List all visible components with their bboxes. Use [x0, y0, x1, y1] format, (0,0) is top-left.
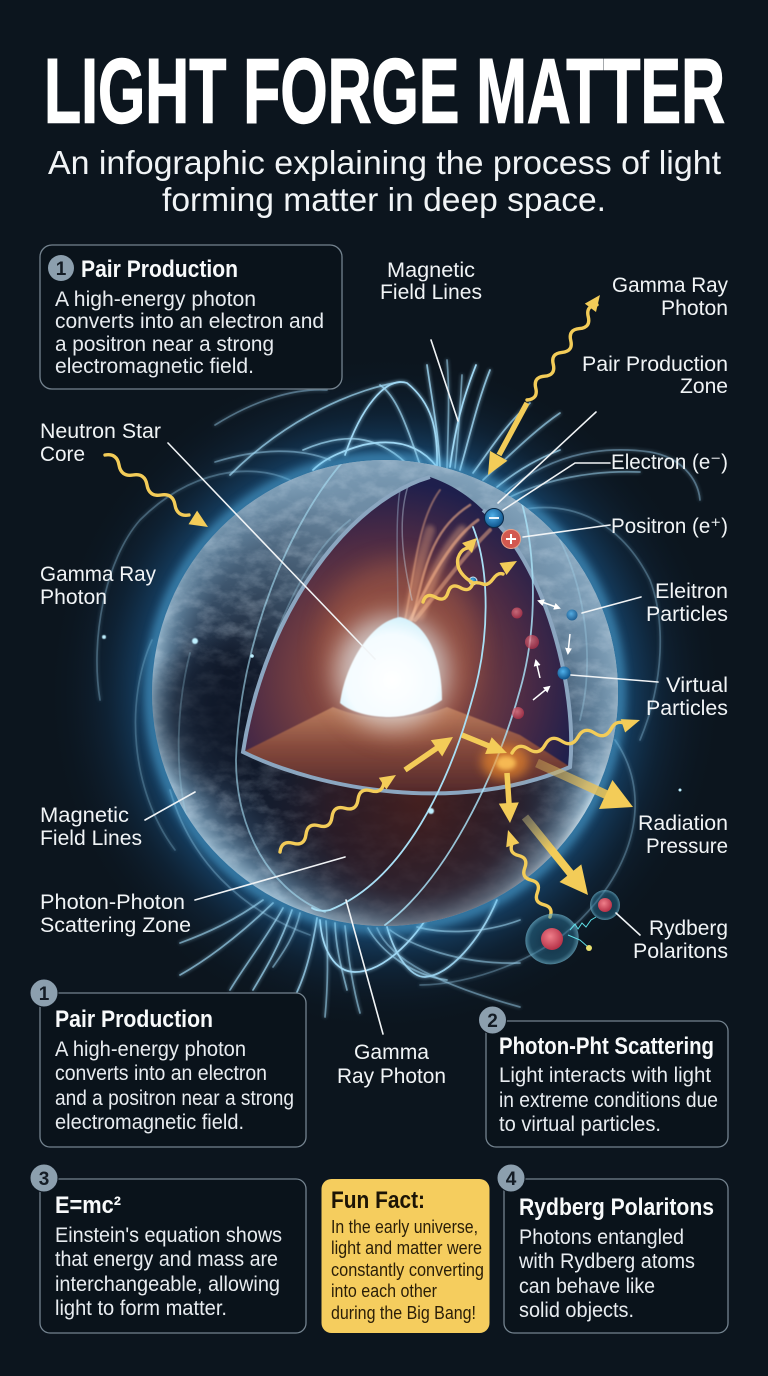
cut-away interior	[243, 477, 571, 793]
small polariton	[590, 890, 620, 920]
magnetic field lines outside sphere	[97, 360, 700, 1017]
heading: Fun Fact:	[331, 1187, 425, 1214]
badge 2	[478, 1006, 506, 1034]
arrow: radiation pressure	[537, 763, 633, 809]
badge 2: 2	[487, 1011, 498, 1032]
virtual particles	[469, 577, 578, 719]
body text: and a positron near a strong	[55, 1087, 294, 1110]
body text: electromagnetic field.	[55, 1111, 244, 1134]
badge 1: 1	[56, 259, 67, 280]
heading: Rydberg Polaritons	[519, 1194, 714, 1221]
body text	[518, 1226, 695, 1322]
small atom	[586, 945, 592, 951]
leader lines	[145, 340, 658, 1034]
label: gamma ray photon bottom: Gamma	[354, 1040, 429, 1064]
badge 3: 3	[39, 1169, 49, 1190]
badge 1	[48, 255, 74, 281]
arrow: down from collision	[499, 773, 519, 823]
body text	[499, 1064, 718, 1136]
core glow	[336, 616, 448, 728]
arrow: lower wavy photon	[280, 775, 396, 852]
heading: Photon-Pht Scattering	[499, 1033, 714, 1060]
panel: card 1 pair production	[30, 979, 306, 1147]
arrow: wavy from polariton	[506, 830, 551, 917]
label: pair production zone: Pair Production	[582, 352, 728, 376]
collision burst	[481, 744, 529, 780]
body text: solid objects.	[519, 1299, 634, 1322]
shell dark left tone	[152, 643, 276, 792]
label: gamma ray photon bottom: Ray Photon	[337, 1064, 446, 1088]
body text	[331, 1216, 484, 1323]
body text: converts into an electron	[55, 1062, 267, 1085]
label: positron: Positron (e⁺)	[611, 514, 728, 538]
label: magnetic field lines left: Magnetic	[40, 803, 129, 827]
label: magnetic field lines left	[40, 803, 142, 850]
body text: Photons entangled	[519, 1226, 684, 1249]
particles	[469, 508, 578, 719]
label: radiation pressure: Pressure	[646, 834, 728, 858]
body text: electromagnetic field.	[55, 355, 254, 378]
label: gamma ray photon top right: Gamma Ray	[612, 273, 728, 297]
body text: to virtual particles.	[499, 1113, 661, 1136]
arrow: photon to collision 2	[462, 735, 507, 754]
body text: In the early universe,	[331, 1216, 478, 1237]
body text: that energy and mass are	[55, 1248, 278, 1271]
body text: light to form matter.	[55, 1297, 227, 1320]
label: eleitron particles: Particles	[646, 602, 728, 626]
label: virtual particles: Virtual	[666, 673, 728, 697]
label: gamma ray photon bottom	[337, 1040, 446, 1088]
interior floor	[245, 706, 568, 792]
cut-away rim	[243, 477, 571, 793]
body text: Einstein's equation shows	[55, 1224, 282, 1247]
subtitle: forming matter in deep space.	[162, 181, 606, 218]
label: scattering zone: Photon-Photon	[40, 890, 185, 914]
field lines through sphere	[179, 457, 587, 925]
small white arrows	[533, 601, 570, 700]
badge 4: 4	[506, 1169, 517, 1190]
positron	[502, 530, 520, 548]
body text: during the Big Bang!	[331, 1302, 476, 1323]
arrow: incoming gamma ray left	[105, 455, 208, 527]
body text: in extreme conditions due	[499, 1089, 718, 1112]
body text: into each other	[331, 1280, 437, 1301]
neutron star sphere	[102, 457, 682, 970]
subtitle: An infographic explaining the process of light	[48, 144, 721, 181]
label: scattering zone	[40, 890, 191, 937]
label: gamma ray photon left: Photon	[40, 585, 107, 609]
label: magnetic field lines top: Field Lines	[380, 280, 482, 304]
label: gamma ray photon left: Gamma Ray	[40, 562, 156, 586]
electron	[484, 508, 504, 528]
sparkles	[102, 635, 682, 814]
body text	[55, 288, 324, 378]
badge 1: 1	[39, 984, 50, 1005]
badge 1	[30, 979, 58, 1007]
arrow: inner wavy photon	[423, 538, 517, 602]
sphere glow	[0, 340, 768, 1040]
label: virtual particles: Particles	[646, 696, 728, 720]
label: neutron star core	[40, 419, 161, 466]
large polariton	[517, 905, 587, 973]
label: scattering zone: Scattering Zone	[40, 913, 191, 937]
arrow: to rydberg polaritons	[525, 817, 588, 895]
body text: can behave like	[519, 1275, 655, 1298]
label: gamma ray photon left	[40, 562, 156, 609]
body text: constantly converting	[331, 1259, 484, 1280]
body text	[55, 1224, 282, 1320]
panel: card 4 rydberg polaritons	[497, 1164, 728, 1333]
subtitle	[48, 144, 721, 218]
body text: Light interacts with light	[499, 1064, 711, 1087]
arrow: gamma ray into pair production zone	[488, 295, 600, 475]
body text: converts into an electron and	[55, 310, 324, 333]
badge 4	[497, 1164, 525, 1192]
body text: A high-energy photon	[55, 1038, 246, 1061]
heading: E=mc²	[55, 1192, 121, 1219]
label: eleitron particles: Eleitron	[655, 579, 728, 603]
body text: light and matter were	[331, 1237, 482, 1258]
panel: top pair production	[40, 245, 342, 389]
label: radiation pressure: Radiation	[638, 811, 728, 835]
neutron star core	[340, 617, 442, 717]
label: pair production zone: Zone	[680, 374, 728, 398]
label: virtual particles	[646, 673, 728, 720]
label: gamma ray photon top right: Photon	[661, 296, 728, 320]
label: radiation pressure	[638, 811, 728, 858]
label: neutron star core: Neutron Star	[40, 419, 161, 443]
label: rydberg polaritons	[633, 916, 728, 963]
shell upper cap tone	[170, 460, 618, 816]
body text	[55, 1038, 294, 1134]
label: magnetic field lines left: Field Lines	[40, 826, 142, 850]
sphere outer glow	[150, 458, 620, 928]
shell brown lower tone	[268, 750, 586, 926]
label: magnetic field lines top	[380, 258, 482, 304]
core plume	[397, 480, 490, 625]
body text: A high-energy photon	[55, 288, 256, 311]
panel: card 3 e=mc2	[30, 1164, 306, 1333]
label: pair production zone	[582, 352, 728, 398]
label: eleitron particles	[646, 579, 728, 626]
label: magnetic field lines top: Magnetic	[387, 258, 475, 282]
heading: Pair Production	[55, 1006, 213, 1033]
panel: card 2 photon scattering	[478, 1006, 728, 1147]
body text: a positron near a strong	[55, 333, 274, 356]
label: gamma ray photon top right	[612, 273, 728, 320]
label: neutron star core: Core	[40, 442, 85, 466]
body text: interchangeable, allowing	[55, 1273, 280, 1296]
rydberg polaritons	[517, 890, 620, 973]
shell surface texture	[150, 458, 620, 928]
entanglement squiggle	[568, 917, 596, 947]
body text: with Rydberg atoms	[518, 1250, 695, 1273]
heading: Pair Production	[81, 256, 238, 283]
label: rydberg polaritons: Rydberg	[649, 916, 728, 940]
panel: fun fact	[322, 1179, 490, 1333]
label: rydberg polaritons: Polaritons	[633, 939, 728, 963]
label: electron: Electron (e⁻)	[611, 450, 728, 474]
badge 3	[30, 1164, 58, 1192]
arrow: photon to collision 1	[405, 737, 453, 770]
sphere shell	[152, 460, 618, 926]
interior orange glow near core	[320, 560, 480, 740]
arrow: outgoing wavy photon	[512, 719, 640, 753]
